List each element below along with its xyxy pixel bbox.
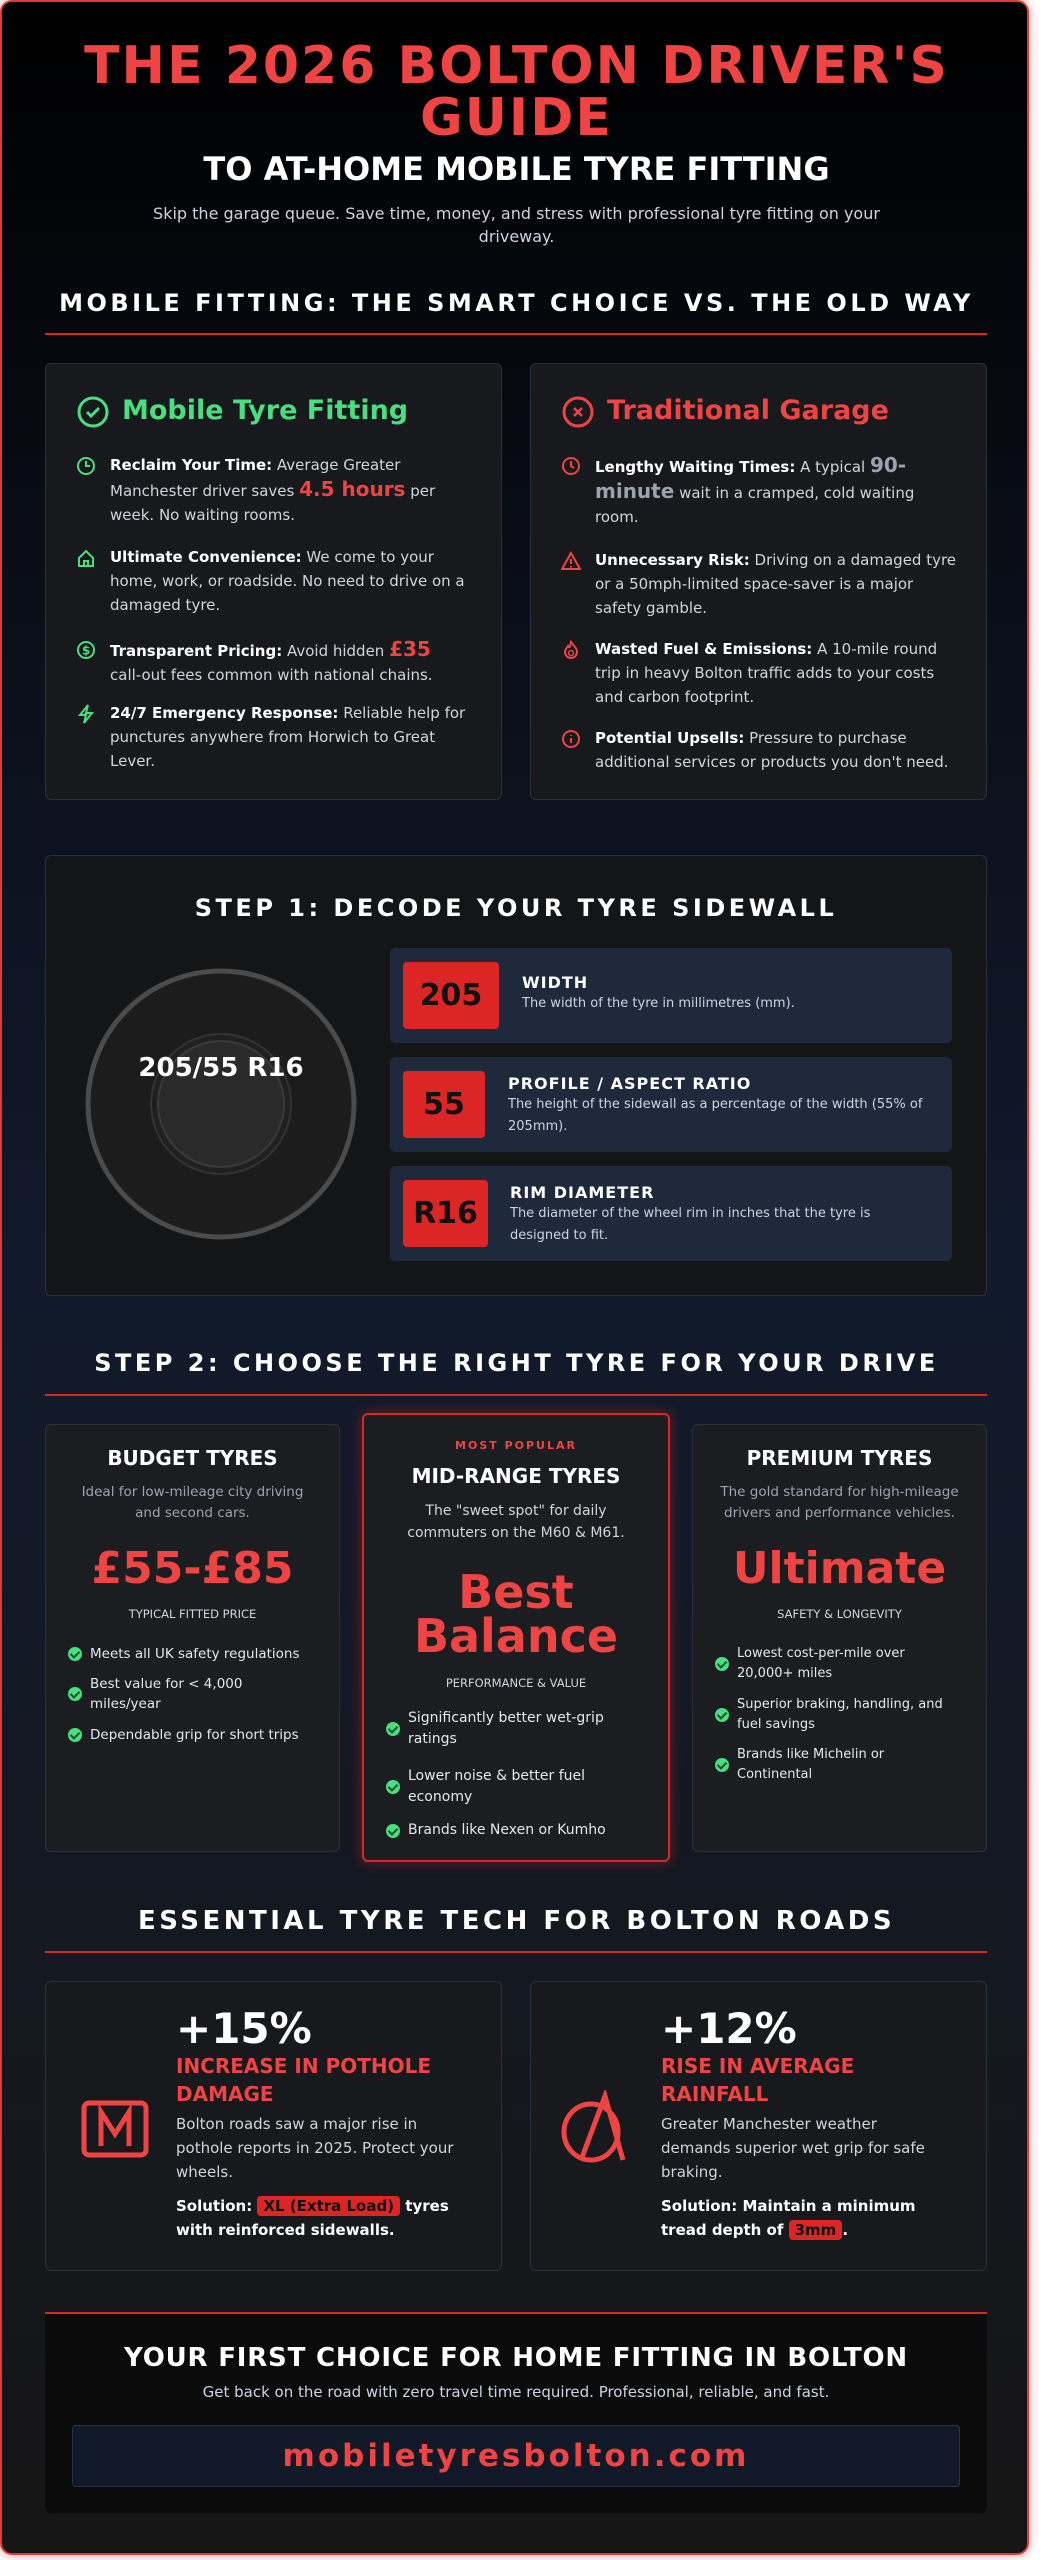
row: profile: PROFILE / ASPECT RATIO	[508, 1074, 751, 1093]
row: width: WIDTH	[522, 973, 588, 992]
row: profile: The height of the sidewall as a percentage of the width (55% of 205mm).	[508, 1097, 922, 1134]
panel: step 1 sidewall	[45, 855, 987, 1296]
row: rim: The diameter of the wheel rim in inches that the tyre is designed to fit.	[510, 1206, 870, 1243]
card: pothole: Bolton roads saw a major rise in pothole reports in 2025. Protect your wheels.	[176, 2115, 454, 2181]
panel: traditional garage	[530, 363, 987, 800]
title	[84, 36, 949, 148]
row: rim: RIM DIAMETER	[510, 1183, 654, 1202]
card: rainfall: Greater Manchester weather demands superior wet grip for safe braking.	[661, 2115, 925, 2181]
tyre diagram	[86, 968, 356, 1240]
card: mid-range: PERFORMANCE & VALUE	[446, 1676, 586, 1690]
card: budget: Dependable grip for short trips	[90, 1727, 299, 1743]
card: budget: £55-£85	[92, 1543, 293, 1594]
heading: comparison: MOBILE FITTING: THE SMART CHOICE VS. THE OLD WAY	[59, 289, 974, 317]
card: rainfall	[530, 1981, 987, 2271]
footer subtext: Get back on the road with zero travel time required. Professional, reliable, and fast.	[203, 2383, 829, 2401]
heading: essential tech: ESSENTIAL TYRE TECH FOR BOLTON ROADS	[138, 1906, 895, 1936]
card: mid-range: Balance	[414, 1609, 618, 1663]
card: premium: Superior braking, handling, and fuel savings	[737, 1697, 943, 1732]
card: pothole: Solution: XL (Extra Load) tyres with reinforced sidewalls.	[176, 2197, 449, 2239]
icon: rain	[562, 2090, 626, 2162]
card: mid-range: Significantly better wet-grip ratings	[408, 1710, 604, 1747]
card: budget: Meets all UK safety regulations	[90, 1646, 300, 1662]
card: premium: SAFETY & LONGEVITY	[777, 1607, 902, 1621]
card: premium: The gold standard for high-mileage drivers and performance vehicles.	[720, 1484, 959, 1521]
card: rainfall: +12%	[661, 2004, 797, 2053]
card: pothole: INCREASE IN POTHOLE DAMAGE	[176, 2054, 431, 2106]
item: upsells: Potential Upsells: Pressure to purchase additional services or products you don't need.	[595, 729, 949, 771]
subtitle: TO AT-HOME MOBILE TYRE FITTING	[203, 150, 830, 188]
item: pricing: Transparent Pricing: Avoid hidden £35 call-out fees common with national chains.	[110, 637, 433, 684]
card: mid-range: Lower noise & better fuel economy	[408, 1768, 585, 1805]
row: profile	[390, 1057, 952, 1152]
title: THE 2026 BOLTON DRIVER'S	[84, 36, 949, 96]
panel heading: mobile: Mobile Tyre Fitting	[122, 395, 408, 426]
row: rim	[390, 1166, 952, 1261]
card: budget: Ideal for low-mileage city driving and second cars.	[82, 1484, 303, 1521]
card: budget: Best value for < 4,000 miles/year	[90, 1676, 242, 1712]
item: convenience: Ultimate Convenience: We come to your home, work, or roadside. No need to drive on a damaged tyre.	[110, 548, 465, 614]
item: risk: Unnecessary Risk: Driving on a damaged tyre or a 50mph-limited space-saver is a major safety gamble.	[595, 551, 956, 617]
card: pothole	[45, 1981, 502, 2271]
footer cta	[45, 2312, 987, 2513]
card: budget: TYPICAL FITTED PRICE	[129, 1607, 256, 1621]
item: pricing: $	[82, 644, 90, 658]
heading: step 2: STEP 2: CHOOSE THE RIGHT TYRE FOR YOUR DRIVE	[94, 1349, 939, 1377]
title: GUIDE	[420, 88, 613, 148]
card: mid-range: Brands like Nexen or Kumho	[408, 1822, 606, 1838]
item: emergency: 24/7 Emergency Response: Reliable help for punctures anywhere from Horwich to Great Lever.	[110, 704, 465, 770]
row: profile: 55	[423, 1087, 465, 1122]
url box: mobiletyresbolton.com	[283, 2438, 749, 2474]
row: width	[390, 948, 952, 1043]
card: budget: BUDGET TYRES	[107, 1446, 278, 1470]
tyre diagram: 205/55 R16	[138, 1053, 304, 1083]
card: rainfall: RISE IN AVERAGE RAINFALL	[661, 2054, 854, 2106]
card: mid-range: MOST POPULAR	[455, 1439, 577, 1452]
card: premium	[692, 1424, 987, 1852]
icon: pothole	[82, 2100, 148, 2158]
card: mid-range: MID-RANGE TYRES	[412, 1464, 620, 1488]
url box	[72, 2425, 960, 2487]
row: width: The width of the tyre in millimetres (mm).	[522, 996, 795, 1011]
row: width: 205	[420, 978, 482, 1013]
card: mid-range: The "sweet spot" for daily commuters on the M60 & M61.	[407, 1503, 625, 1541]
card: premium: Lowest cost-per-mile over 20,000+ miles	[737, 1646, 905, 1681]
card: rainfall: Solution: Maintain a minimum tread depth of 3mm .	[661, 2197, 916, 2239]
row: rim: R16	[413, 1196, 478, 1231]
item: reclaim time: Reclaim Your Time: Average Greater Manchester driver saves 4.5 hours per week. No waiting rooms.	[110, 456, 435, 524]
item: fuel: Wasted Fuel & Emissions: A 10-mile round trip in heavy Bolton traffic adds to your costs and carbon footprint.	[595, 640, 937, 706]
card: premium: PREMIUM TYRES	[747, 1446, 932, 1470]
card: budget	[45, 1424, 340, 1852]
panel heading: garage: Traditional Garage	[607, 395, 889, 426]
card: mid-range	[362, 1413, 670, 1862]
tagline: Skip the garage queue. Save time, money, and stress with professional tyre fitting on your driveway.	[153, 204, 880, 246]
card: premium: Ultimate	[733, 1543, 946, 1594]
heading: step 1: STEP 1: DECODE YOUR TYRE SIDEWALL	[195, 894, 837, 922]
card: pothole: +15%	[176, 2004, 312, 2053]
card: premium: Brands like Michelin or Continental	[737, 1747, 884, 1782]
panel: mobile tyre fitting	[45, 363, 502, 800]
item: waiting: Lengthy Waiting Times: A typical 90-minute wait in a cramped, cold waiting room.	[595, 453, 914, 526]
card: mid-range: Best	[458, 1565, 574, 1619]
footer heading: YOUR FIRST CHOICE FOR HOME FITTING IN BOLTON	[124, 2343, 908, 2373]
